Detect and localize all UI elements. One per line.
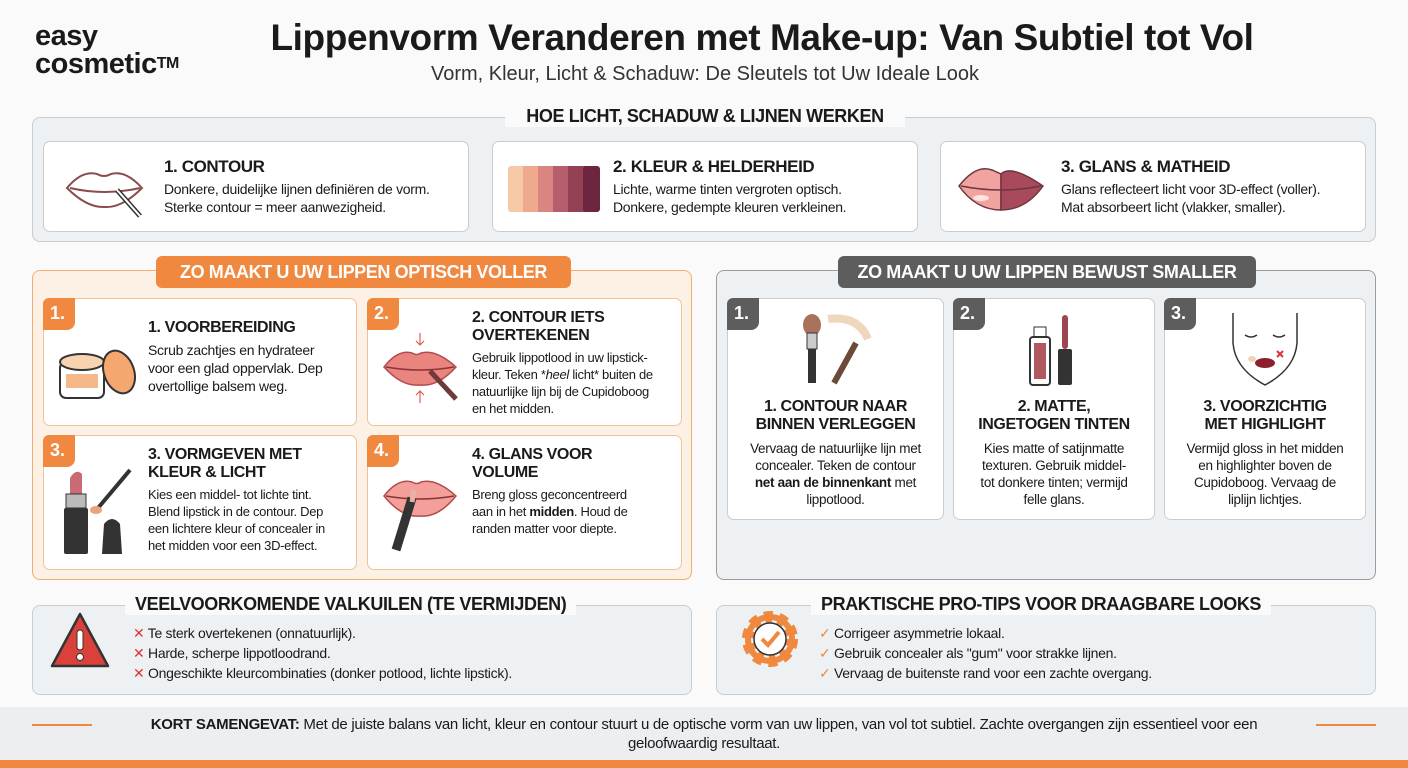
card 2: felle glans.: [1024, 492, 1084, 507]
panel: fuller lips: [32, 270, 692, 580]
icon: lipstick and brush: [64, 468, 132, 554]
card 3: en highlighter boven de: [1198, 458, 1332, 473]
card 1: BINNEN VERLEGGEN: [756, 416, 915, 433]
logo: cosmeticTM: [35, 48, 179, 80]
card 2: [953, 298, 1155, 520]
card: gloss: Glans reflecteert licht voor 3D-effect (voller).: [1061, 181, 1320, 197]
card 2: texturen. Gebruik middel-: [982, 458, 1126, 473]
card: contour: [43, 141, 469, 232]
card 2: natuurlijke lijn bij de Cupidoboog: [472, 384, 649, 399]
list: ✓ Gebruik concealer als "gum" voor strakke lijnen.: [819, 645, 1117, 661]
heading: PRAKTISCHE PRO-TIPS VOOR DRAAGBARE LOOKS: [821, 594, 1261, 614]
card 2: 2.: [374, 303, 389, 323]
card: colour: [492, 141, 918, 232]
panel: pitfalls: [32, 605, 692, 695]
card: gloss: 3. GLANS & MATHEID: [1061, 157, 1230, 176]
card 2: 2.: [960, 303, 975, 323]
panel heading: ZO MAAKT U UW LIPPEN OPTISCH VOLLER: [180, 262, 547, 282]
card 3: Vermijd gloss in het midden: [1186, 441, 1344, 456]
card 2: 2. MATTE,: [1018, 398, 1090, 415]
card 3: KLEUR & LICHT: [148, 464, 265, 481]
card 4: 4. GLANS VOOR: [472, 446, 592, 463]
card: gloss: Mat absorbeert licht (vlakker, smaller).: [1061, 199, 1286, 215]
card 1: [43, 298, 357, 426]
list: ✕ Ongeschikte kleurcombinaties (donker potlood, lichte lipstick).: [133, 665, 512, 681]
card 2: 2. CONTOUR IETS: [472, 309, 604, 326]
icon: glossy lips with wand: [383, 480, 457, 552]
panel heading: HOE LICHT, SCHADUW & LIJNEN WERKEN: [526, 106, 884, 126]
card 2: [367, 298, 682, 426]
card 1: 1.: [50, 303, 65, 323]
card 1: 1. VOORBEREIDING: [148, 319, 295, 336]
card 3: [43, 435, 357, 570]
panel heading: ZO MAAKT U UW LIPPEN BEWUST SMALLER: [858, 262, 1236, 282]
card 1: 1.: [734, 303, 749, 323]
icon: liquid lipstick: [1029, 315, 1072, 386]
icon: gear with check: [742, 611, 798, 667]
list: ✓ Corrigeer asymmetrie lokaal.: [819, 625, 1005, 641]
list: ✕ Te sterk overtekenen (onnatuurlijk).: [133, 625, 356, 641]
title: Lippenvorm Veranderen met Make-up: Van Subtiel tot Vol: [270, 17, 1254, 58]
text: [164, 157, 430, 215]
text: Sterke contour = meer aanwezigheid.: [164, 199, 386, 215]
summary footer: [0, 707, 1408, 760]
panel: pro tips: [716, 605, 1376, 695]
card 4: VOLUME: [472, 464, 538, 481]
card 2: OVERTEKENEN: [472, 327, 589, 344]
text: 1. CONTOUR: [164, 157, 265, 176]
card: colour: Donkere, gedempte kleuren verkleinen.: [613, 199, 846, 215]
card 4: Breng gloss geconcentreerd: [472, 487, 627, 502]
card 3: 3.: [1171, 303, 1186, 323]
card 2: kleur. Teken *heel licht* buiten de: [472, 367, 653, 382]
card 1: overtollige balsem weg.: [148, 378, 287, 394]
list: ✓ Vervaag de buitenste rand voor een zachte overgang.: [819, 665, 1152, 681]
card 1: Vervaag de natuurlijke lijn met: [750, 441, 921, 456]
card: colour: Lichte, warme tinten vergroten optisch.: [613, 181, 842, 197]
card 4: 4.: [374, 440, 389, 460]
card 4: randen matter voor diepte.: [472, 521, 617, 536]
card 3: 3.: [50, 440, 65, 460]
icon: cream jar: [59, 350, 136, 399]
card 3: MET HIGHLIGHT: [1204, 416, 1326, 433]
card 4: [367, 435, 682, 570]
icon: warning: [50, 612, 110, 668]
card 3: 3. VORMGEVEN MET: [148, 446, 302, 463]
list: [819, 625, 1152, 681]
panel: how light shadow lines work: [32, 117, 1376, 242]
panel heading: [838, 256, 1256, 288]
subtitle: Vorm, Kleur, Licht & Schaduw: De Sleutels tot Uw Ideale Look: [431, 63, 979, 85]
card 1: 1. CONTOUR NAAR: [764, 398, 907, 415]
list: ✕ Harde, scherpe lippotloodrand.: [133, 645, 330, 661]
icon: brush and pencil: [803, 314, 872, 384]
card 2: INGETOGEN TINTEN: [978, 416, 1130, 433]
card 2: Kies matte of satijnmatte: [984, 441, 1124, 456]
card 3: [1164, 298, 1366, 520]
icon: half gloss lips: [958, 168, 1044, 211]
card 1: concealer. Teken de contour: [755, 458, 916, 473]
card 1: net aan de binnenkant met: [755, 475, 916, 490]
logo: easy: [35, 20, 98, 52]
card 2: Gebruik lippotlood in uw lipstick-: [472, 350, 648, 365]
card 1: voor een glad oppervlak. Dep: [148, 360, 322, 376]
summary text: KORT SAMENGEVAT: Met de juiste balans van licht, kleur en contour stuurt u de optische vorm van uw lippen, van vol tot subtiel. Zachte overgangen zijn essentieel voor een geloofwaardig resultaat.: [151, 716, 1257, 752]
card 1: lippotlood.: [806, 492, 865, 507]
card: gloss: [940, 141, 1366, 232]
card 3: een lichtere kleur of concealer in: [148, 521, 325, 536]
card 3: Kies een middel- tot lichte tint.: [148, 487, 312, 502]
card 2: en het midden.: [472, 401, 554, 416]
logo: [35, 20, 179, 80]
card 3: het midden voor een 3D-effect.: [148, 538, 317, 553]
card 3: Blend lipstick in de contour. Dep: [148, 504, 323, 519]
panel heading: [156, 256, 571, 288]
card 1: [727, 298, 944, 520]
heading: VEELVOORKOMENDE VALKUILEN (TE VERMIJDEN): [135, 594, 566, 614]
panel: smaller lips: [716, 270, 1376, 580]
card 2: tot donkere tinten; vermijd: [980, 475, 1128, 490]
icon: lips with pencil: [383, 333, 458, 403]
card 4: aan in het midden. Houd de: [472, 504, 628, 519]
icon: face with lips: [1232, 313, 1298, 386]
card 3: liplijn lichtjes.: [1228, 492, 1302, 507]
card 3: 3. VOORZICHTIG: [1203, 398, 1327, 415]
card: colour: 2. KLEUR & HELDERHEID: [613, 157, 814, 176]
text: Donkere, duidelijke lijnen definiëren de vorm.: [164, 181, 430, 197]
list: [133, 625, 512, 681]
icon: lips outline with pencil: [66, 172, 144, 218]
card 3: Cupidoboog. Vervaag de: [1194, 475, 1336, 490]
icon: swatches: [508, 166, 600, 212]
card 1: Scrub zachtjes en hydrateer: [148, 342, 314, 358]
